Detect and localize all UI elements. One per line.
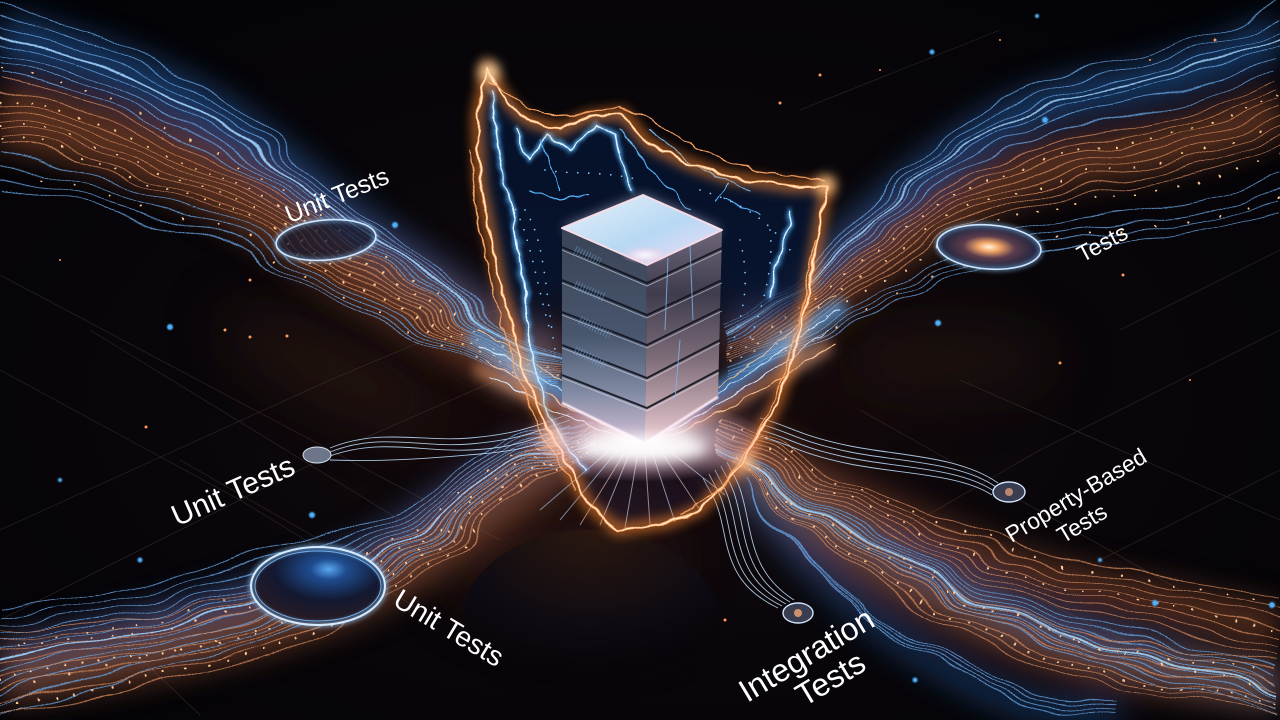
server circuit detail xyxy=(575,245,693,400)
server stack xyxy=(562,195,722,443)
shield outline xyxy=(470,68,827,530)
server bottom edge xyxy=(562,397,718,443)
shield particles xyxy=(510,170,790,360)
server left face xyxy=(562,228,647,443)
top-left data stream xyxy=(0,3,560,385)
shield interior xyxy=(477,68,827,530)
server slats xyxy=(562,247,722,408)
server slat highlights xyxy=(562,250,722,411)
convergence glow left and right xyxy=(495,331,822,388)
server glow xyxy=(562,195,722,265)
shield outline glow xyxy=(477,68,827,530)
bright point under server xyxy=(577,435,707,461)
server top hot spot xyxy=(621,246,669,264)
label: Unit Tests top: Unit Tests xyxy=(281,162,393,229)
nebula haze xyxy=(209,292,1060,620)
shield corner flares xyxy=(479,62,835,473)
server right face xyxy=(645,230,722,443)
label: Property-Based Tests: Property-Based xyxy=(1001,443,1151,547)
node: small right xyxy=(993,482,1025,502)
label: Property-Based Tests: Tests xyxy=(1052,498,1112,548)
node: top-right ring xyxy=(936,221,1042,273)
dark dome under shield xyxy=(460,530,720,720)
node: small bottom xyxy=(783,603,813,623)
shield xyxy=(470,62,845,530)
glow beneath server xyxy=(517,398,767,482)
top-right data stream xyxy=(730,1,1280,374)
node: large bottom-left ring xyxy=(251,547,385,625)
label: Integration Tests: Tests xyxy=(789,644,872,713)
label: Unit Tests middle: Unit Tests xyxy=(167,450,300,533)
bottom-left data stream xyxy=(0,422,590,714)
bottom-right data stream xyxy=(720,417,1280,716)
rays below server xyxy=(540,450,725,528)
streams passing through shield xyxy=(470,295,845,445)
node feed lines xyxy=(330,414,998,608)
server top face xyxy=(562,195,722,265)
node: small left xyxy=(303,447,331,463)
blue lightning xyxy=(492,90,790,470)
label: Integration Tests: Integration xyxy=(732,600,880,709)
node: top-left ring xyxy=(274,216,378,264)
label: Unit Tests bottom: Unit Tests xyxy=(388,583,509,673)
label: Tests right: Tests xyxy=(1072,219,1132,267)
